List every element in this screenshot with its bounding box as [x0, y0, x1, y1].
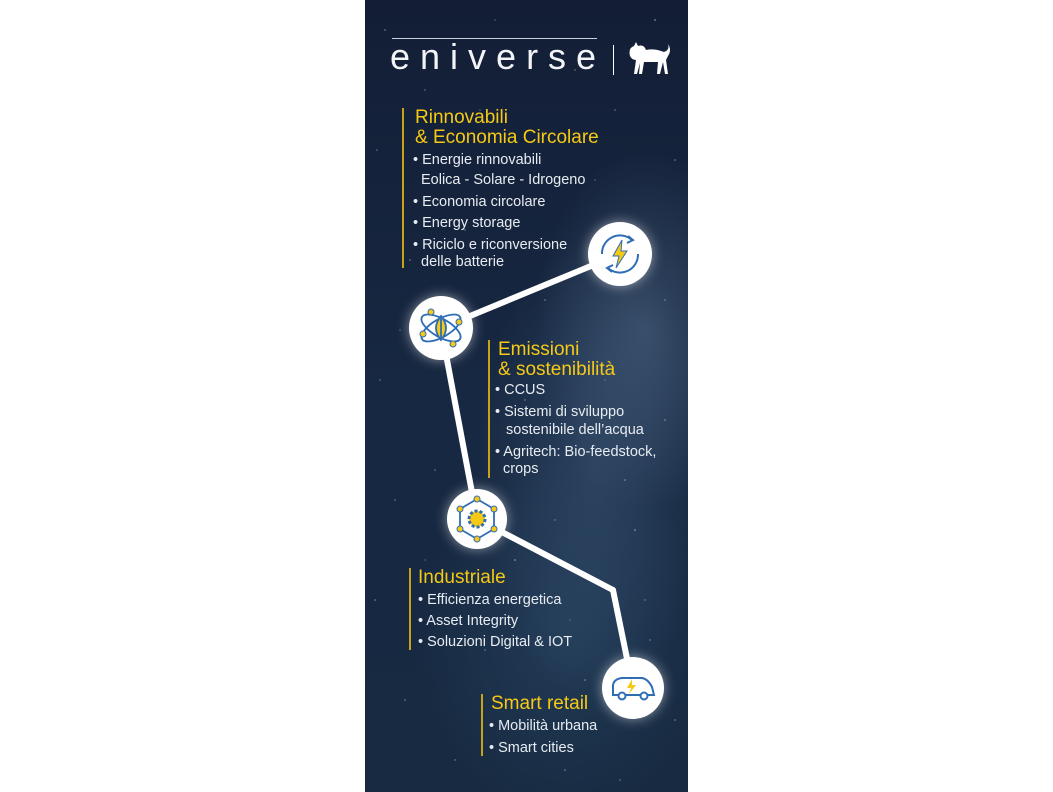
icon: electric car [602, 657, 664, 719]
section: Industriale: • Asset Integrity [418, 613, 518, 629]
logo: eniverse [390, 36, 606, 77]
section: Industriale [409, 567, 572, 650]
section: Rinnovabili: & Economia Circolare [415, 127, 599, 148]
icon: six-legged dog [630, 42, 670, 74]
connecting lines [441, 254, 633, 688]
section: Rinnovabili: • Economia circolare [413, 194, 545, 210]
section: Industriale: Industriale [418, 567, 506, 588]
section: Emissioni: • Agritech: Bio-feedstock, [495, 444, 656, 460]
section: Emissioni: Emissioni [498, 339, 579, 360]
section: Rinnovabili: • Energy storage [413, 215, 520, 231]
section: Rinnovabili: Rinnovabili [415, 107, 508, 128]
section: Industriale: • Soluzioni Digital & IOT [418, 634, 572, 650]
section: Rinnovabili [402, 107, 599, 270]
section: Emissioni: crops [503, 461, 538, 477]
icon: atom leaf [409, 296, 473, 360]
section: Smart retail: Smart retail [491, 693, 588, 714]
panel: starfield background [365, 0, 688, 792]
section: Smart retail [481, 693, 598, 756]
icon: renewable cycle [588, 222, 652, 286]
section: Rinnovabili: • Energie rinnovabili [413, 152, 541, 168]
section: Emissioni: • CCUS [495, 382, 545, 398]
section: Emissioni: sostenibile dell’acqua [506, 422, 644, 438]
section: Smart retail: • Mobilità urbana [489, 718, 597, 734]
section: Emissioni [488, 339, 656, 478]
section: Smart retail: • Smart cities [489, 740, 574, 756]
section: Industriale: • Efficienza energetica [418, 592, 561, 608]
section: Rinnovabili: • Riciclo e riconversione [413, 237, 567, 253]
section: Emissioni: & sostenibilità [498, 359, 615, 380]
section: Emissioni: • Sistemi di sviluppo [495, 404, 624, 420]
section: Rinnovabili: Eolica - Solare - Idrogeno [421, 172, 585, 188]
section: Rinnovabili: delle batterie [421, 254, 504, 270]
icon: gear network [447, 489, 507, 549]
